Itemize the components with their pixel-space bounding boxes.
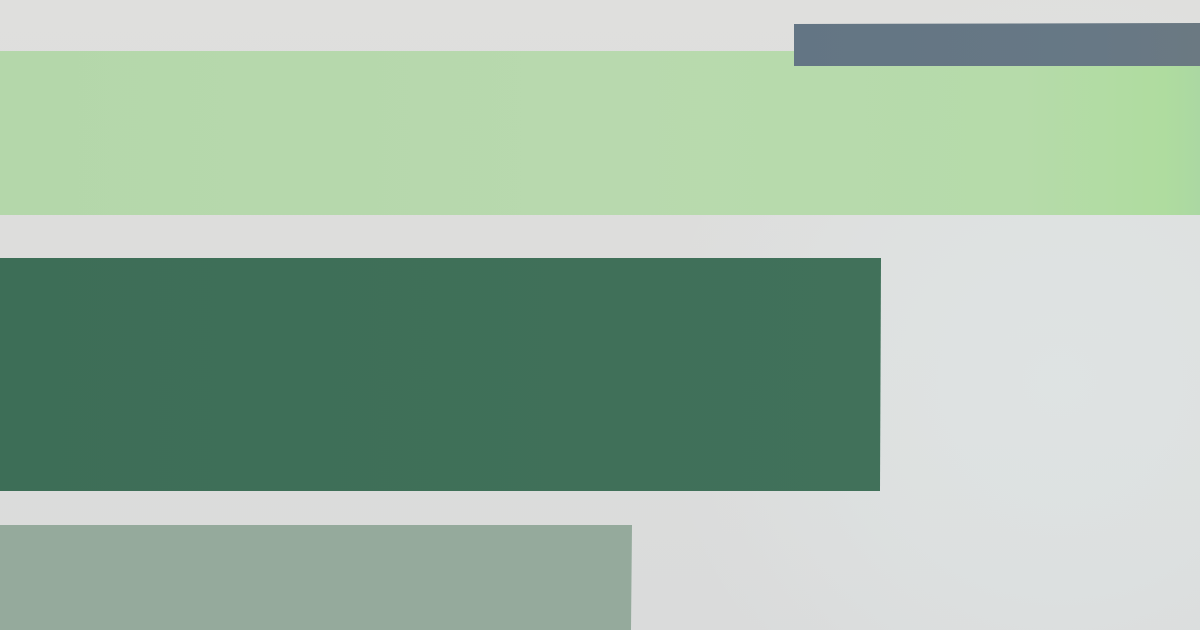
- dark green block: [0, 258, 881, 491]
- light green band: [0, 51, 1200, 215]
- slate bar: [794, 23, 1200, 66]
- muted sage block: [0, 525, 632, 630]
